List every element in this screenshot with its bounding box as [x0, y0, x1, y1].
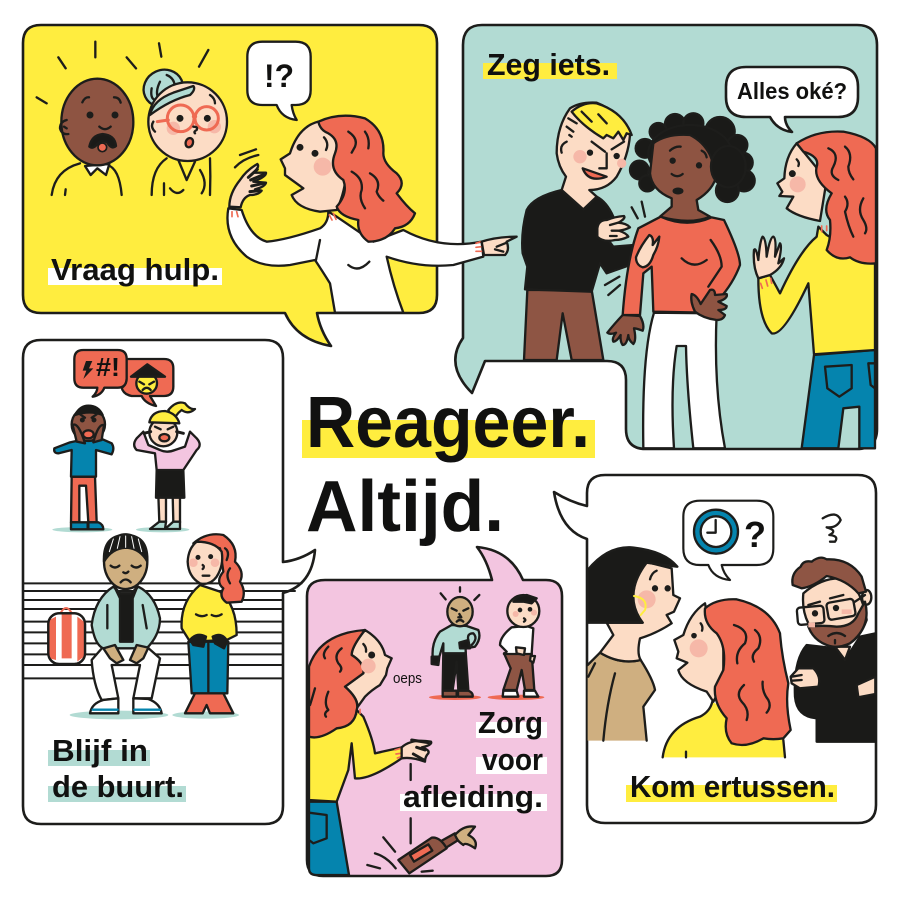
man hair: [572, 103, 632, 140]
woman hand hanging: [607, 315, 643, 345]
woman hair side patch: [711, 146, 746, 187]
shy man shoes: [503, 691, 538, 697]
confused scribble: [823, 515, 841, 542]
bench man hands: [103, 645, 148, 663]
bench woman hands: [190, 635, 227, 648]
centre woman hair: [705, 599, 791, 745]
top man head: [72, 408, 105, 441]
illustration: bystanders and woman: [37, 42, 517, 313]
right woman sweater: [758, 227, 875, 354]
hair strand highlights: [109, 536, 142, 552]
man glasses: [797, 595, 865, 627]
bench man hair: [104, 535, 147, 562]
question mark in bubble: ?: [744, 514, 766, 555]
title line 1: Reageer.: [306, 383, 590, 463]
shy man hands: [516, 647, 535, 663]
top woman face: [144, 427, 183, 441]
jeans pockets: [825, 363, 875, 397]
top man trousers: [71, 477, 97, 522]
caption: Zeg iets: [483, 47, 617, 82]
angry man shoes: [443, 691, 473, 697]
bottle neck: [440, 833, 458, 848]
top woman hair: [149, 411, 179, 423]
man head: [557, 103, 630, 209]
radiating lines: [37, 42, 208, 103]
illustration: woman, two men, bottle: [309, 587, 544, 875]
caption highlight line 1: [48, 750, 150, 766]
man ear: [862, 590, 871, 605]
woman face details: [298, 132, 383, 208]
woman hair: [630, 113, 755, 202]
teal speech-bubble shape: [455, 25, 877, 449]
man neck: [835, 647, 850, 660]
top man face and hands: [73, 414, 104, 443]
man collar: [85, 164, 109, 175]
caption highlight: [483, 63, 617, 79]
man hair: [792, 558, 866, 593]
woman jeans: [309, 802, 349, 875]
caption highlight: [626, 785, 837, 802]
impact lines: [605, 202, 645, 295]
woman trousers: [643, 313, 725, 448]
panel: Blijf in de buurt: [23, 340, 315, 824]
caption: Kom ertussen: [626, 769, 837, 804]
bench man trousers: [92, 647, 160, 700]
bubble outline: [726, 67, 858, 132]
left woman hair: [588, 547, 677, 623]
man beard: [808, 602, 867, 647]
top woman shoes: [150, 522, 180, 529]
panel: Zorg voor afleiding: [307, 547, 562, 876]
left woman neck and face: [600, 562, 680, 661]
ground shadows: [52, 527, 239, 719]
caption text: Zeg iets.: [487, 47, 610, 82]
highlight 1: [476, 722, 547, 738]
bench man jacket: [92, 587, 160, 648]
caption highlight line 2: [48, 786, 186, 802]
title highlight: [302, 420, 595, 458]
panel: Zeg iets: [455, 25, 877, 449]
bench man face: [111, 566, 141, 582]
shoe stripes: [93, 706, 160, 713]
pointing hand: [482, 237, 517, 255]
top woman skirt: [156, 470, 184, 498]
caption line 2: voor: [482, 742, 543, 777]
backpack: [48, 608, 85, 664]
woman sweater: [309, 708, 402, 802]
man ear: [60, 120, 68, 134]
angry bubble: insulting cartoon face: [122, 359, 173, 406]
man hand on arm: [636, 235, 659, 267]
top man hair: [75, 406, 103, 415]
caption line 1: Blijf in: [52, 733, 148, 768]
fist arm curl: [468, 633, 475, 645]
caption line 3: afleiding.: [403, 779, 543, 814]
highlight 2: [476, 757, 547, 774]
white speech-bubble shape: [554, 475, 876, 823]
woman body with arms: [227, 208, 483, 313]
right woman jeans: [802, 350, 875, 448]
bench woman face: [188, 542, 222, 584]
bench woman hair back and head: [193, 534, 244, 603]
pink speech-bubble shape: [307, 547, 562, 876]
man sweater: [522, 190, 635, 292]
bench slats: [24, 583, 302, 678]
shy man hair: [513, 595, 537, 603]
shy man head: [507, 595, 539, 627]
symbols in bubble: #!: [96, 352, 120, 382]
bench woman jeans: [188, 642, 228, 693]
top man shoes: [71, 522, 103, 529]
woman neck and face: [650, 135, 717, 221]
man mouth: [828, 633, 845, 643]
left woman face details: [634, 571, 670, 615]
body lines: [316, 240, 369, 268]
left woman top outline: [588, 653, 655, 741]
top woman head: [149, 418, 177, 446]
speech bubble !?: [247, 42, 311, 120]
centre woman face details: [690, 623, 770, 720]
caption text: Vraag hulp.: [51, 252, 219, 287]
right woman face details: [790, 147, 866, 237]
left men shadows: [429, 695, 544, 700]
raised hand fingers: [248, 169, 263, 192]
man body: [52, 163, 122, 195]
woman face: [345, 630, 392, 708]
bench woman boots: [185, 693, 233, 713]
left woman top: [588, 653, 655, 741]
man arm hand left: [791, 668, 819, 688]
older woman head: [148, 82, 227, 161]
bench man inner sweater: [114, 587, 137, 642]
cuff marks: [357, 709, 401, 758]
angry man face: [452, 608, 468, 622]
bottle label: [410, 844, 432, 862]
angry man fist and hand: [432, 640, 470, 665]
top man sweater: [54, 437, 113, 477]
exclamation: oeps: oeps: [393, 671, 422, 687]
woman face details: [670, 147, 707, 193]
caption: Vraag hulp: [48, 252, 222, 287]
title: Reageer. Altijd.: [302, 383, 595, 547]
cuff and collar marks: [232, 212, 482, 251]
title line 2: Altijd.: [306, 467, 504, 547]
sweater bust lines: [196, 614, 222, 616]
white speech-bubble shape: [23, 340, 315, 824]
raised hand: [229, 164, 266, 207]
bench man shoes: [90, 698, 162, 713]
right woman cuff marks: [761, 226, 827, 288]
centre woman sweater: [663, 702, 785, 757]
man hand finger lines: [610, 223, 619, 236]
woman hand on hip: [691, 290, 727, 320]
right woman face: [777, 143, 827, 221]
right woman hair: [797, 131, 876, 264]
shy man shirt: [500, 626, 533, 654]
man hand left fingers: [792, 675, 802, 681]
woman face: [281, 122, 346, 212]
older woman face: [152, 95, 221, 148]
top woman ponytail: [168, 402, 195, 422]
illustration: bench and people: [24, 350, 302, 719]
panel: Kom ertussen: [554, 475, 876, 823]
centre woman face: [674, 603, 723, 702]
angry man sweater: [433, 625, 479, 657]
crash lines: [367, 837, 433, 872]
angry man head: [447, 597, 473, 626]
woman face details: [310, 644, 376, 717]
caption text: Kom ertussen.: [630, 769, 835, 804]
centre woman sweater outline: [663, 702, 785, 757]
woman top lines: [682, 240, 722, 287]
highlight 3: [400, 794, 547, 811]
man head: [803, 578, 867, 647]
woman hair: [309, 630, 365, 737]
wave lines: [235, 149, 258, 167]
pointing hand fingers: [495, 243, 507, 252]
man face: [82, 97, 121, 152]
bubble: clock question: [683, 501, 773, 580]
bun: [137, 63, 189, 113]
jeans pocket: [309, 813, 327, 843]
speech bubble: Alles oké: [726, 67, 858, 132]
caption line 2: de buurt.: [52, 769, 184, 804]
older woman body: [152, 158, 210, 195]
bench woman face details: [189, 548, 230, 583]
woman top: [623, 217, 740, 315]
man face details: [561, 112, 626, 179]
caption: Blijf in de buurt: [48, 733, 186, 804]
shy man trousers: [503, 653, 534, 690]
man trousers: [524, 290, 603, 360]
bun curls: [151, 75, 175, 100]
top woman legs: [158, 495, 180, 522]
panel: Vraag hulp: [23, 25, 517, 346]
yellow speech-bubble shape: [23, 25, 437, 346]
woman hair: [318, 116, 415, 242]
shy man face: [513, 608, 537, 622]
illustration: three people: [522, 103, 876, 448]
angry bubble: symbols: [74, 350, 127, 397]
falling-bottle dashed line: [407, 764, 414, 843]
bench man head: [104, 534, 147, 589]
man hand right: [857, 677, 875, 697]
older woman hair band: [150, 86, 194, 115]
bottle foam: [455, 826, 476, 848]
bubble text: !?: [264, 58, 294, 94]
top woman top: [134, 432, 200, 470]
collar V: [178, 160, 195, 180]
man head: [61, 79, 133, 165]
bench woman sweater: [182, 585, 237, 642]
woman hand: [402, 741, 431, 762]
man sweater: [795, 633, 875, 742]
bottle body: [398, 838, 447, 873]
caption: Zorg voor afleiding: [400, 705, 547, 814]
angry man emphasis lines: [441, 587, 479, 600]
illustration: three people: [588, 501, 875, 757]
bubble text: Alles oké?: [737, 78, 847, 104]
jacket seams: [107, 605, 147, 628]
right woman raised hand: [754, 237, 784, 278]
angry man trousers: [443, 652, 468, 690]
caption line 1: Zorg: [478, 705, 543, 740]
caption highlight: [48, 268, 222, 285]
woman fingers: [412, 740, 428, 760]
man hand: [597, 216, 630, 241]
